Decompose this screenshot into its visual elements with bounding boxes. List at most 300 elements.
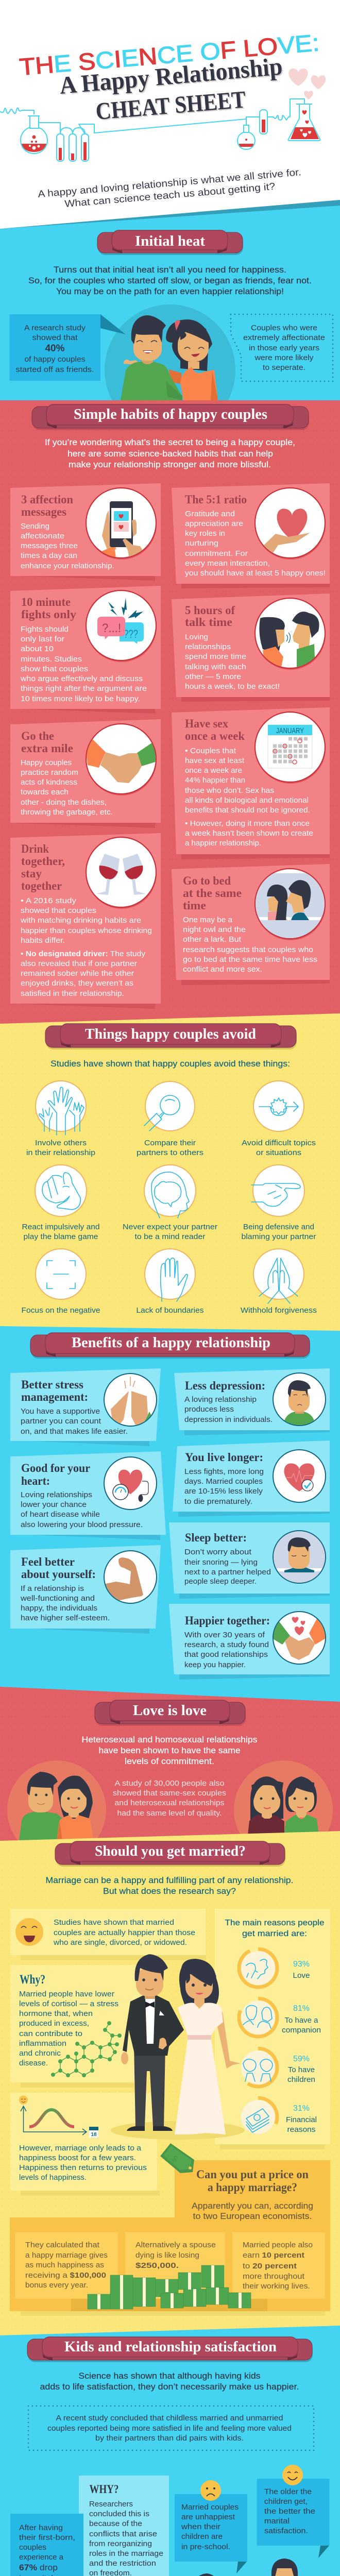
card: you live longer	[173, 1440, 330, 1517]
panel: why researchers: WHY?	[90, 2483, 118, 2496]
panel: $250,000: dying is like losing	[135, 2251, 199, 2260]
body text: satisfied in their relationship.	[21, 989, 124, 998]
body text: hours a week, to be exact!	[185, 682, 280, 691]
item: avoid difficult topics	[242, 1081, 316, 1157]
heading	[21, 493, 73, 518]
body text: can contribute to	[19, 2029, 82, 2038]
item: being defensive	[241, 1165, 316, 1241]
icon: calendar	[255, 712, 326, 784]
panel: why researchers: Researchers	[89, 2500, 133, 2509]
body text: enhance your relationship.	[21, 562, 114, 570]
panel: earn 10-20 percent: more throughout	[243, 2272, 305, 2281]
intro paragraph: have been shown to have the same	[99, 1745, 240, 1755]
item: react impulsively: React impulsively and	[22, 1223, 100, 1231]
intro paragraph: levels of commitment.	[125, 1756, 214, 1766]
body text: key roles in	[185, 529, 225, 538]
banner: Things happy couples avoid	[45, 1024, 297, 1049]
panel: price on a happy marriage	[10, 2143, 330, 2316]
heading: once a week	[185, 730, 245, 742]
body text: also lowering your blood pressure.	[21, 1520, 143, 1529]
intro paragraph: Turns out that initial heat isn’t all you need for happiness.	[54, 265, 286, 275]
body text	[184, 1548, 271, 1586]
bride	[175, 1959, 241, 2134]
illustration: heterosexual couple	[7, 1760, 106, 1859]
panel: why researchers: and the restriction	[89, 2559, 156, 2568]
stat: 81% companion: companion	[282, 2026, 321, 2035]
item: react impulsively	[22, 1165, 100, 1241]
body text: a week hasn’t been shown to create	[185, 829, 313, 838]
body text: nurturing	[185, 539, 218, 548]
stat: 93% love	[239, 1949, 310, 1987]
heading: fights only	[21, 608, 77, 621]
intro paragraph: So, for the couples who started off slow, or began as friends, fear not.	[28, 276, 312, 285]
stat: 93% love: Love	[293, 1971, 310, 1980]
panel: happiness boost chart	[10, 2093, 160, 2196]
study text: had the same level of quality.	[117, 1809, 222, 1818]
callout: recent study: couples reported being more satisfied in life and feeling more valued	[47, 2424, 292, 2433]
heading: talk time	[185, 616, 232, 629]
item: compare partners	[137, 1081, 203, 1157]
callout: affectionate couples: were more likely	[254, 353, 314, 362]
icon: handshake	[85, 724, 157, 795]
card: drink together	[10, 833, 161, 1009]
card: have sex once a week	[172, 707, 330, 859]
body text: inflammation	[19, 2039, 66, 2048]
body text: hormone that, when	[19, 2009, 93, 2018]
heading: together,	[21, 855, 65, 868]
body text: and chronic	[19, 2049, 61, 2058]
heading: You live longer:	[185, 1451, 263, 1464]
body text: • Couples that	[185, 747, 236, 755]
heading: 5 hours of	[185, 604, 235, 617]
body text: produces less	[184, 1405, 234, 1414]
icon: sad face	[200, 2480, 221, 2501]
banner: Benefits	[30, 1333, 310, 1359]
stat: 59% children: To have	[288, 2065, 315, 2074]
intro paragraph: here are some science-backed habits that can help	[67, 449, 273, 459]
callout: 67% drop: experience a	[19, 2553, 64, 2562]
panel: $100,000: receiving a $100,000	[25, 2271, 106, 2280]
stat: 81% companion: To have a	[284, 2016, 318, 2025]
body text: happy, the individuals	[21, 1604, 97, 1613]
body text: habits differ.	[21, 936, 65, 945]
icon: right lab glassware with hearts	[237, 69, 326, 149]
callout: affectionate couples: extremely affectionate	[243, 333, 325, 342]
callout: 40% friends: A research study	[24, 324, 86, 332]
body text: • No designated driver: The study	[21, 950, 146, 958]
card: better stress management	[10, 1368, 161, 1446]
body text: other - doing the dishes,	[21, 798, 107, 807]
body text: have higher self-esteem.	[21, 1614, 110, 1622]
body text: show that couples	[21, 665, 88, 673]
body text: other a lark. But	[183, 935, 242, 944]
item: avoid difficult topics: Avoid difficult topics	[242, 1139, 316, 1147]
heading	[185, 604, 235, 629]
icon: speech bubbles: ???	[124, 628, 138, 640]
callout: older children: marital	[264, 2517, 290, 2526]
stat: 59% children	[239, 2048, 315, 2087]
body text: about 10	[21, 645, 54, 653]
body text: keep you happier.	[184, 1660, 246, 1669]
intro text	[45, 1875, 294, 1896]
intro paragraph	[45, 437, 295, 469]
panel: why researchers: roles in the marriage	[89, 2549, 163, 2558]
icon: calendar: JANUARY	[276, 726, 304, 735]
body text: enjoyed drinks, they weren’t as	[21, 979, 133, 988]
icon: laughing emoji	[15, 1918, 43, 1946]
stat: 81% companion: 81%	[293, 2004, 310, 2013]
heading	[21, 1555, 96, 1581]
callout: affectionate couples: in those early years	[249, 344, 319, 352]
text: couples are actually happier than those	[54, 1928, 195, 1937]
callout: preschool unhappy	[175, 2480, 247, 2573]
panel: $100,000: They calculated that	[25, 2241, 100, 2249]
body text	[185, 510, 326, 578]
heading: Sleep better:	[185, 1531, 247, 1544]
heading: 3 affection	[21, 493, 73, 506]
intro paragraph: Science has shown that although having kids	[78, 2371, 261, 2381]
panel: main reasons	[215, 1909, 330, 2149]
intro paragraph: You may be on the path for an even happier relationship!	[56, 286, 284, 296]
intro text: Studies have shown that happy couples avoid these things:	[50, 1059, 290, 1069]
icon: phone with heart messages	[86, 488, 157, 562]
heading: Why?	[20, 1973, 45, 1987]
text: Studies have shown that married	[54, 1918, 174, 1927]
study text: and heterosexual relationships	[114, 1799, 225, 1807]
icon: couple talking	[255, 598, 326, 670]
panel: $100,000: a happy marriage gives	[25, 2251, 108, 2260]
icon: heart in hand	[255, 488, 326, 560]
card: happier together	[169, 1604, 330, 1680]
callout: older children	[257, 2465, 330, 2558]
body text: days. Married couples	[184, 1477, 263, 1486]
panel: earn 10-20 percent: earn 10 percent	[243, 2251, 304, 2260]
item: involve others: in their relationship	[26, 1148, 95, 1157]
icon: sleeping man	[273, 1531, 326, 1584]
body text: A loving relationship	[184, 1395, 257, 1404]
illustration: stacks of money	[71, 2265, 267, 2311]
body text: conflict and more sex.	[183, 965, 262, 974]
callout: affectionate couples: to seperate.	[263, 363, 305, 372]
illustration: same-sex couple	[234, 1760, 333, 1859]
banner: Simple habits	[32, 404, 309, 430]
icon: speech bubbles	[86, 590, 157, 662]
stat: 31% financial: Financial	[286, 2115, 317, 2124]
body text: their snoring — lying	[184, 1558, 258, 1567]
panel: earn 10-20 percent: Married people also	[243, 2241, 313, 2249]
heading: heart:	[21, 1475, 50, 1487]
heading: Can you put a price on	[196, 2168, 309, 2181]
card: sleep better	[169, 1522, 330, 1599]
body text: who argue effectively and discuss	[20, 674, 143, 683]
chart: happiness over time: 18	[91, 2132, 97, 2138]
subtitle heading: A Happy Relationship Cheat Sheet: A Happy Relationship	[59, 54, 284, 100]
body text: remained sober while the other	[21, 969, 134, 978]
card: good for your heart	[10, 1451, 166, 1540]
body text: have sex at least	[185, 756, 245, 765]
callout: 67% drop: After having	[19, 2523, 63, 2532]
body text: Less fights, more long	[184, 1467, 264, 1476]
icon: green price tag: $	[170, 2154, 179, 2164]
banner: Benefits: Benefits of a happy relationship	[72, 1335, 270, 1351]
header section	[0, 0, 340, 237]
illustration: teen	[265, 2558, 304, 2576]
stat: 59% children: 59%	[293, 2055, 310, 2063]
body text: once a week are	[185, 766, 242, 775]
section: kids and relationship satisfaction	[0, 2326, 340, 2576]
section: love is love	[0, 1687, 340, 1859]
body text: Sending	[21, 522, 49, 531]
heading: The 5:1 ratio	[185, 493, 247, 506]
section: should you get married	[0, 1831, 340, 2344]
heading: Have sex	[185, 717, 228, 730]
heading	[196, 2168, 309, 2194]
panel: $100,000: bonus every year.	[25, 2281, 88, 2290]
callout: older children: The older the	[264, 2487, 312, 2496]
body text: produced in excess,	[19, 2019, 89, 2028]
item: involve others: Involve others	[35, 1139, 87, 1147]
body text: practice random	[21, 768, 78, 777]
heading: Drink	[21, 842, 49, 855]
body text: levels of cortisol — a stress	[19, 1999, 118, 2008]
callout: 67% drop: their first-born,	[19, 2533, 75, 2542]
card: go to bed at the same time	[172, 864, 330, 985]
card: 3 affection messages	[10, 483, 161, 581]
section: things happy couples avoid	[0, 1013, 340, 1340]
subtitle heading: A Happy Relationship Cheat Sheet: CHEAT SHEET	[95, 86, 247, 125]
heading: Better stress	[21, 1378, 83, 1391]
heading: time	[183, 899, 206, 912]
heading: a happy marriage?	[208, 2181, 297, 2194]
stat: 81% companion	[239, 1998, 321, 2037]
banner: Things happy couples avoid: Things happy couples avoid	[85, 1026, 256, 1042]
body text: acts of kindness	[21, 778, 77, 787]
subheading: Apparently you can, according	[192, 2201, 313, 2211]
intro paragraph: make your relationship stronger and more blissful.	[69, 460, 271, 469]
heading: get married are:	[242, 1929, 307, 1938]
heading: management:	[21, 1391, 88, 1403]
card: less depression	[174, 1368, 330, 1435]
body text	[21, 1407, 128, 1436]
callout: preschool unhappy: in pre-school.	[181, 2543, 230, 2551]
stat: 59% children: children	[287, 2075, 315, 2084]
stat: 93% love: 93%	[293, 1960, 310, 1969]
body text: every mean interaction,	[185, 559, 270, 568]
illustration: happy couple	[105, 304, 235, 435]
heading	[21, 730, 73, 755]
banner: Initial heat	[97, 230, 243, 255]
intro text: What can science teach us about getting it?	[64, 181, 276, 210]
body text: disease.	[19, 2059, 48, 2067]
item: withhold forgiveness	[241, 1249, 317, 1315]
banner: Kids: Kids and relationship satisfaction	[64, 2339, 277, 2355]
body text	[21, 758, 113, 817]
panel: $250,000: $250,000.	[135, 2261, 179, 2270]
body text: • A 2016 study	[21, 896, 77, 905]
body text	[19, 1990, 118, 2067]
intro paragraph	[81, 1735, 258, 1766]
body text: Don’t worry about	[184, 1548, 252, 1556]
study text: showed that same-sex couples	[113, 1789, 226, 1798]
body text	[20, 625, 147, 703]
body text: Gratitude and	[185, 510, 235, 518]
body text: appreciation are	[185, 519, 243, 528]
body text: only last for	[21, 635, 64, 643]
illustration: child	[189, 2573, 223, 2576]
intro paragraph: If you’re wondering what’s the secret to being a happy couple,	[45, 437, 295, 447]
callout: recent study: A recent study concluded that childless married and unmarried	[56, 2414, 283, 2422]
heading: at the same	[183, 887, 242, 900]
callout: 40% friends: of happy couples	[25, 355, 86, 364]
study text: A study of 30,000 people also	[114, 1779, 225, 1788]
intro text: Marriage can be a happy and fulfilling part of any relationship.	[45, 1875, 294, 1885]
body text: research, a study found	[184, 1640, 269, 1649]
icon: handshake with hearts	[272, 1612, 326, 1664]
icon: heart with check	[273, 1450, 326, 1502]
item: compare partners: Compare their	[144, 1139, 196, 1147]
callout: recent study: by their partners than did pairs with kids.	[95, 2434, 244, 2443]
section: simple habits of happy couples	[0, 400, 340, 1034]
heading	[21, 1378, 88, 1403]
body text: partner you can count	[21, 1417, 101, 1426]
body text: showed that couples	[21, 906, 96, 915]
panel: why researchers: because of the	[89, 2519, 142, 2528]
study text	[113, 1779, 226, 1818]
banner: Simple habits: Simple habits of happy couples	[74, 406, 267, 422]
banner: Kids	[27, 2337, 313, 2362]
panel: why researchers: from reorganizing	[89, 2539, 152, 2548]
heading: Go to bed	[183, 874, 231, 887]
body text	[185, 747, 313, 848]
body text: relationships	[185, 642, 231, 651]
body text: However, marriage only leads to a	[19, 2144, 142, 2153]
panel: why researchers: concluded this is	[89, 2510, 149, 2518]
panel: $250,000: Alternatively a spouse	[135, 2241, 216, 2249]
intro paragraph: Heterosexual and homosexual relationships	[81, 1735, 258, 1744]
body text	[21, 522, 114, 570]
item: lack of boundaries	[136, 1249, 204, 1315]
body text: those who don’t. Sex has	[185, 786, 274, 795]
heading	[21, 596, 77, 621]
body text	[184, 1467, 264, 1506]
body text: Married people have lower	[19, 1990, 114, 1998]
item: involve others	[26, 1081, 95, 1157]
item: react impulsively: play the blame game	[24, 1232, 98, 1241]
body text: Fights should	[21, 625, 69, 634]
body text: also revealed that if one partner	[21, 959, 137, 968]
callout: 67% drop: 67% drop	[19, 2563, 58, 2572]
body text: things right after the argument are	[21, 684, 147, 693]
callout: 40% friends: started off as friends.	[15, 365, 94, 374]
heading	[21, 1462, 90, 1487]
body text	[184, 1631, 269, 1669]
icon: left lab glassware	[0, 108, 246, 161]
body text: research suggests that couples who	[183, 945, 313, 954]
body text: to die prematurely.	[184, 1497, 252, 1506]
banner: Initial heat: Initial heat	[135, 233, 206, 249]
panel: why researchers	[79, 2476, 169, 2576]
groom	[121, 1954, 184, 2131]
item: withhold forgiveness: Withhold forgiveness	[241, 1306, 317, 1315]
callout: 67% drop: couples	[19, 2543, 46, 2552]
panel: earn 10-20 percent: to 20 percent	[243, 2262, 297, 2270]
section: benefits of a happy relationship	[0, 1326, 340, 1710]
callout: 40% friends	[9, 314, 126, 381]
heading: together	[21, 879, 62, 892]
icon: flexed arm	[103, 1551, 157, 1603]
body text: Loving	[185, 633, 208, 641]
intro text	[38, 167, 302, 210]
panel: married couples happier	[10, 1909, 206, 1960]
body text: of heart disease while	[21, 1510, 100, 1519]
callout: preschool unhappy: children are	[181, 2532, 223, 2541]
heading: messages	[21, 505, 66, 518]
heading: Go the	[21, 730, 54, 742]
panel: earn 10-20 percent	[232, 2232, 325, 2299]
subheading	[192, 2201, 313, 2221]
callout: preschool unhappy: Married couples	[181, 2503, 239, 2512]
stat: 31% financial: 31%	[293, 2104, 310, 2113]
icon: green price tag	[160, 2143, 194, 2173]
illustration: bride and groom	[111, 1954, 245, 2140]
card: 5 hours of talk time	[172, 594, 330, 702]
item: mind reader: to be a mind reader	[135, 1232, 206, 1241]
subtitle heading: A Happy Relationship Cheat Sheet	[58, 53, 284, 126]
body text: Happiness then returns to previous	[19, 2163, 147, 2172]
body text	[21, 1490, 143, 1529]
body text: With over 30 years of	[184, 1631, 265, 1639]
body text: messages three	[21, 541, 78, 550]
stat: 31% financial: reasons	[287, 2125, 315, 2134]
panel: $250,000	[125, 2232, 225, 2299]
body text: • However, doing it more than once	[185, 819, 310, 828]
body text: with matching drinking habits are	[20, 916, 141, 925]
item: being defensive: Being defensive and	[243, 1223, 314, 1231]
heading: Less depression:	[185, 1379, 265, 1392]
icon: high five	[103, 1374, 157, 1432]
card: the 5:1 ratio	[172, 483, 330, 588]
title: The Science of Love: THE SCIENCE OF LOVE:	[19, 29, 320, 80]
item: being defensive: blaming your partner	[241, 1232, 316, 1241]
subheading: to two European economists.	[193, 2211, 312, 2221]
icon: speech bubbles: ?...!	[102, 621, 121, 635]
body text: You have a supportive	[21, 1407, 100, 1416]
callout: affectionate couples: Couples who were	[251, 324, 317, 332]
heading	[183, 874, 242, 912]
body text: times a day can	[21, 551, 77, 560]
item: lack of boundaries: Lack of boundaries	[136, 1306, 204, 1315]
body text: Happy couples	[21, 758, 72, 767]
body text: towards each	[21, 788, 69, 796]
chart: happiness over time	[19, 2096, 98, 2138]
body text: that good relationships	[184, 1650, 268, 1659]
body text: One may be a	[183, 916, 233, 924]
heading: Happier together:	[185, 1614, 270, 1627]
panel: earn 10-20 percent: their working lives.	[243, 2282, 310, 2291]
body text	[19, 2144, 147, 2182]
text	[53, 1918, 195, 1947]
intro paragraph	[40, 2371, 299, 2392]
item: mind reader: Never expect your partner	[123, 1223, 217, 1231]
item: avoid difficult topics: or situations	[256, 1148, 301, 1157]
callout: older children: children get,	[264, 2497, 308, 2506]
subtitle heading: A Happy Relationship Cheat Sheet: CHEAT SHEET	[96, 87, 248, 126]
stat: 31% financial	[239, 2098, 317, 2136]
card: feel better about yourself	[10, 1545, 161, 1634]
body text: If a relationship is	[21, 1584, 84, 1593]
icon: sad man	[273, 1373, 326, 1426]
subtitle heading: A Happy Relationship Cheat Sheet: A Happy Relationship	[58, 53, 283, 99]
